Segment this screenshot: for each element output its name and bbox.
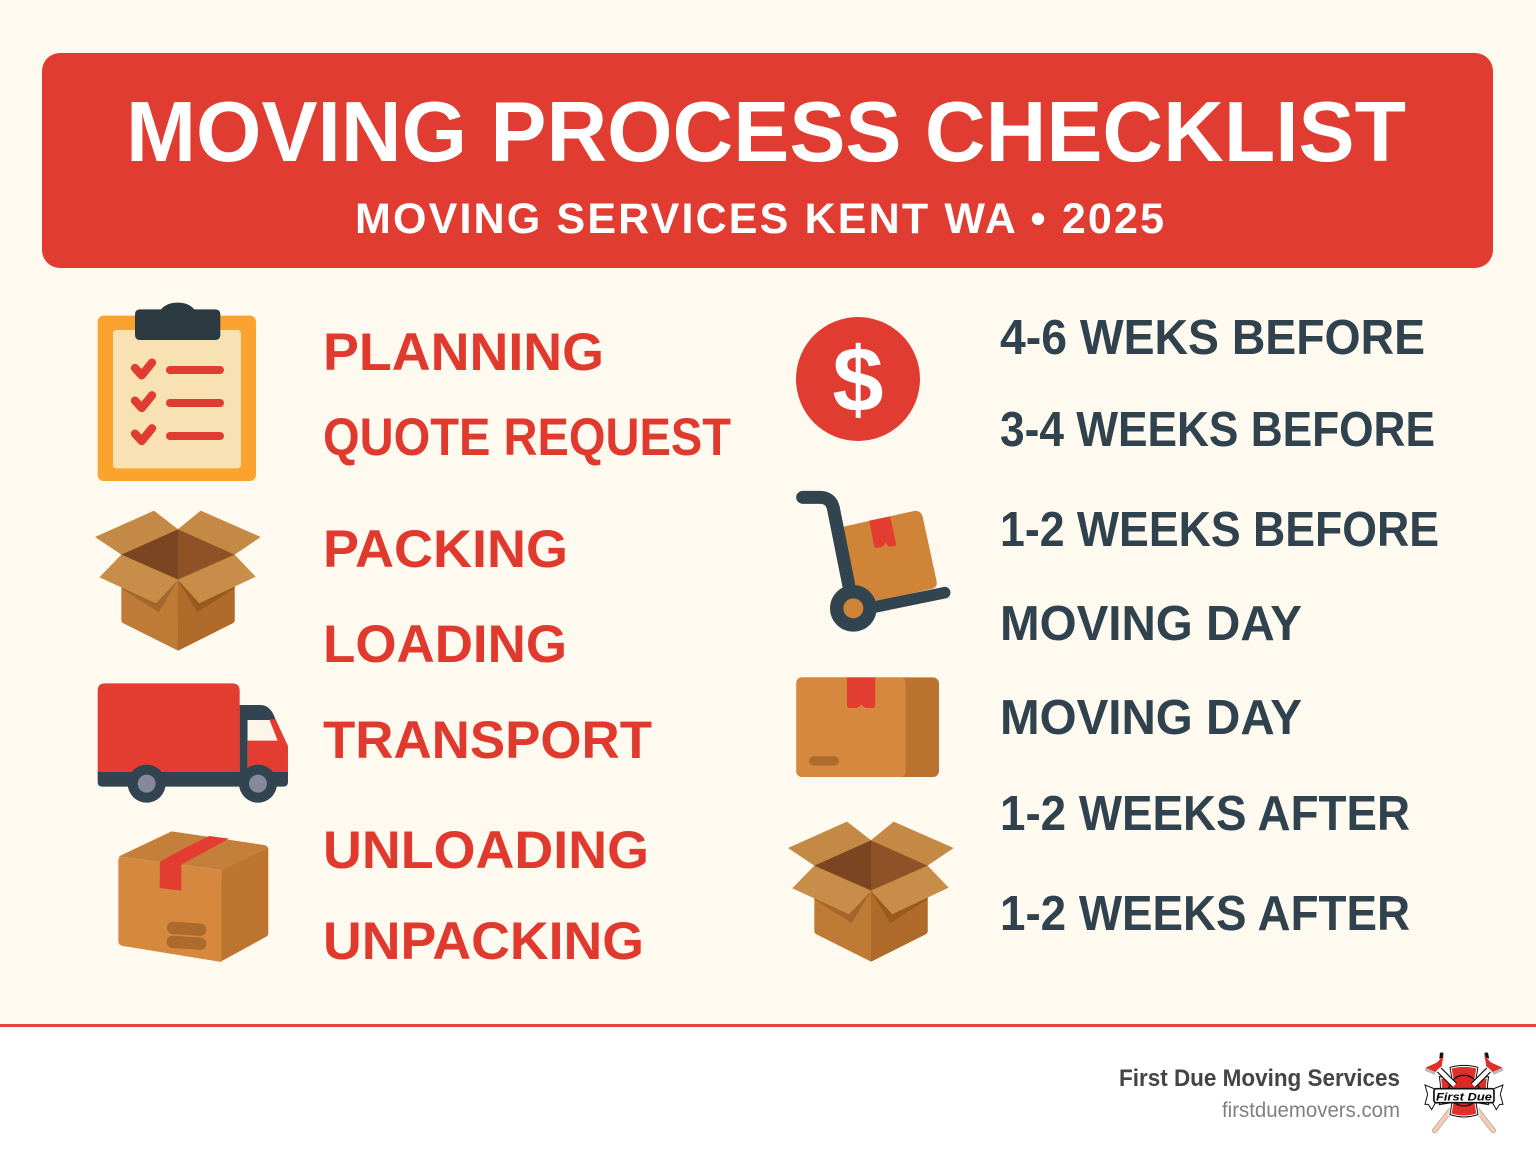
timing: 1-2 weeks after: 1-2 WEEKS AFTER: [1000, 887, 1410, 941]
company name: First Due Moving Services: [1119, 1065, 1400, 1092]
label: unpacking: UNPACKING: [323, 912, 644, 971]
icon: open box right: [788, 822, 954, 962]
icon: clipboard: [98, 303, 256, 481]
timing: 1-2 weeks after: 1-2 WEEKS AFTER: [1000, 787, 1410, 841]
footer: [0, 1024, 1536, 1154]
logo wordmark: First Due: [1436, 1091, 1492, 1103]
title: MOVING PROCESS CHECKLIST: [126, 85, 1406, 180]
label: loading: LOADING: [323, 615, 567, 674]
timing: 3-4 weeks before: 3-4 WEEKS BEFORE: [1000, 403, 1435, 457]
upper axe handles: [1439, 1070, 1489, 1085]
label: unloading: UNLOADING: [323, 821, 649, 880]
header banner: [42, 53, 1493, 268]
icon: dollar coin: [796, 317, 920, 441]
timing: moving day: MOVING DAY: [1000, 597, 1302, 651]
timing: 1-2 weeks before: 1-2 WEEKS BEFORE: [1000, 503, 1439, 557]
icon: truck: [98, 683, 288, 803]
axe heads: [1425, 1053, 1444, 1075]
label: packing: PACKING: [323, 520, 568, 579]
banner: [1425, 1085, 1435, 1110]
label: quote request: QUOTE REQUEST: [323, 408, 731, 467]
logo: [1425, 1053, 1503, 1131]
icon: dollar coin: $: [832, 329, 884, 431]
icon: hand truck with box: [803, 497, 945, 632]
label: transport: TRANSPORT: [323, 711, 652, 770]
icon: closed box: [796, 677, 939, 777]
timing: moving day: MOVING DAY: [1000, 691, 1302, 745]
lower axe handles: [1435, 1110, 1493, 1131]
label: planning: PLANNING: [323, 323, 604, 382]
maltese cross: [1439, 1065, 1489, 1117]
timing: 4-6 weeks before: 4-6 WEKS BEFORE: [1000, 311, 1425, 365]
icon: taped box: [118, 831, 268, 962]
icon: open box: [95, 511, 261, 651]
website: firstduemovers.com: [1222, 1099, 1400, 1122]
subtitle: MOVING SERVICES KENT WA • 2025: [355, 195, 1164, 243]
